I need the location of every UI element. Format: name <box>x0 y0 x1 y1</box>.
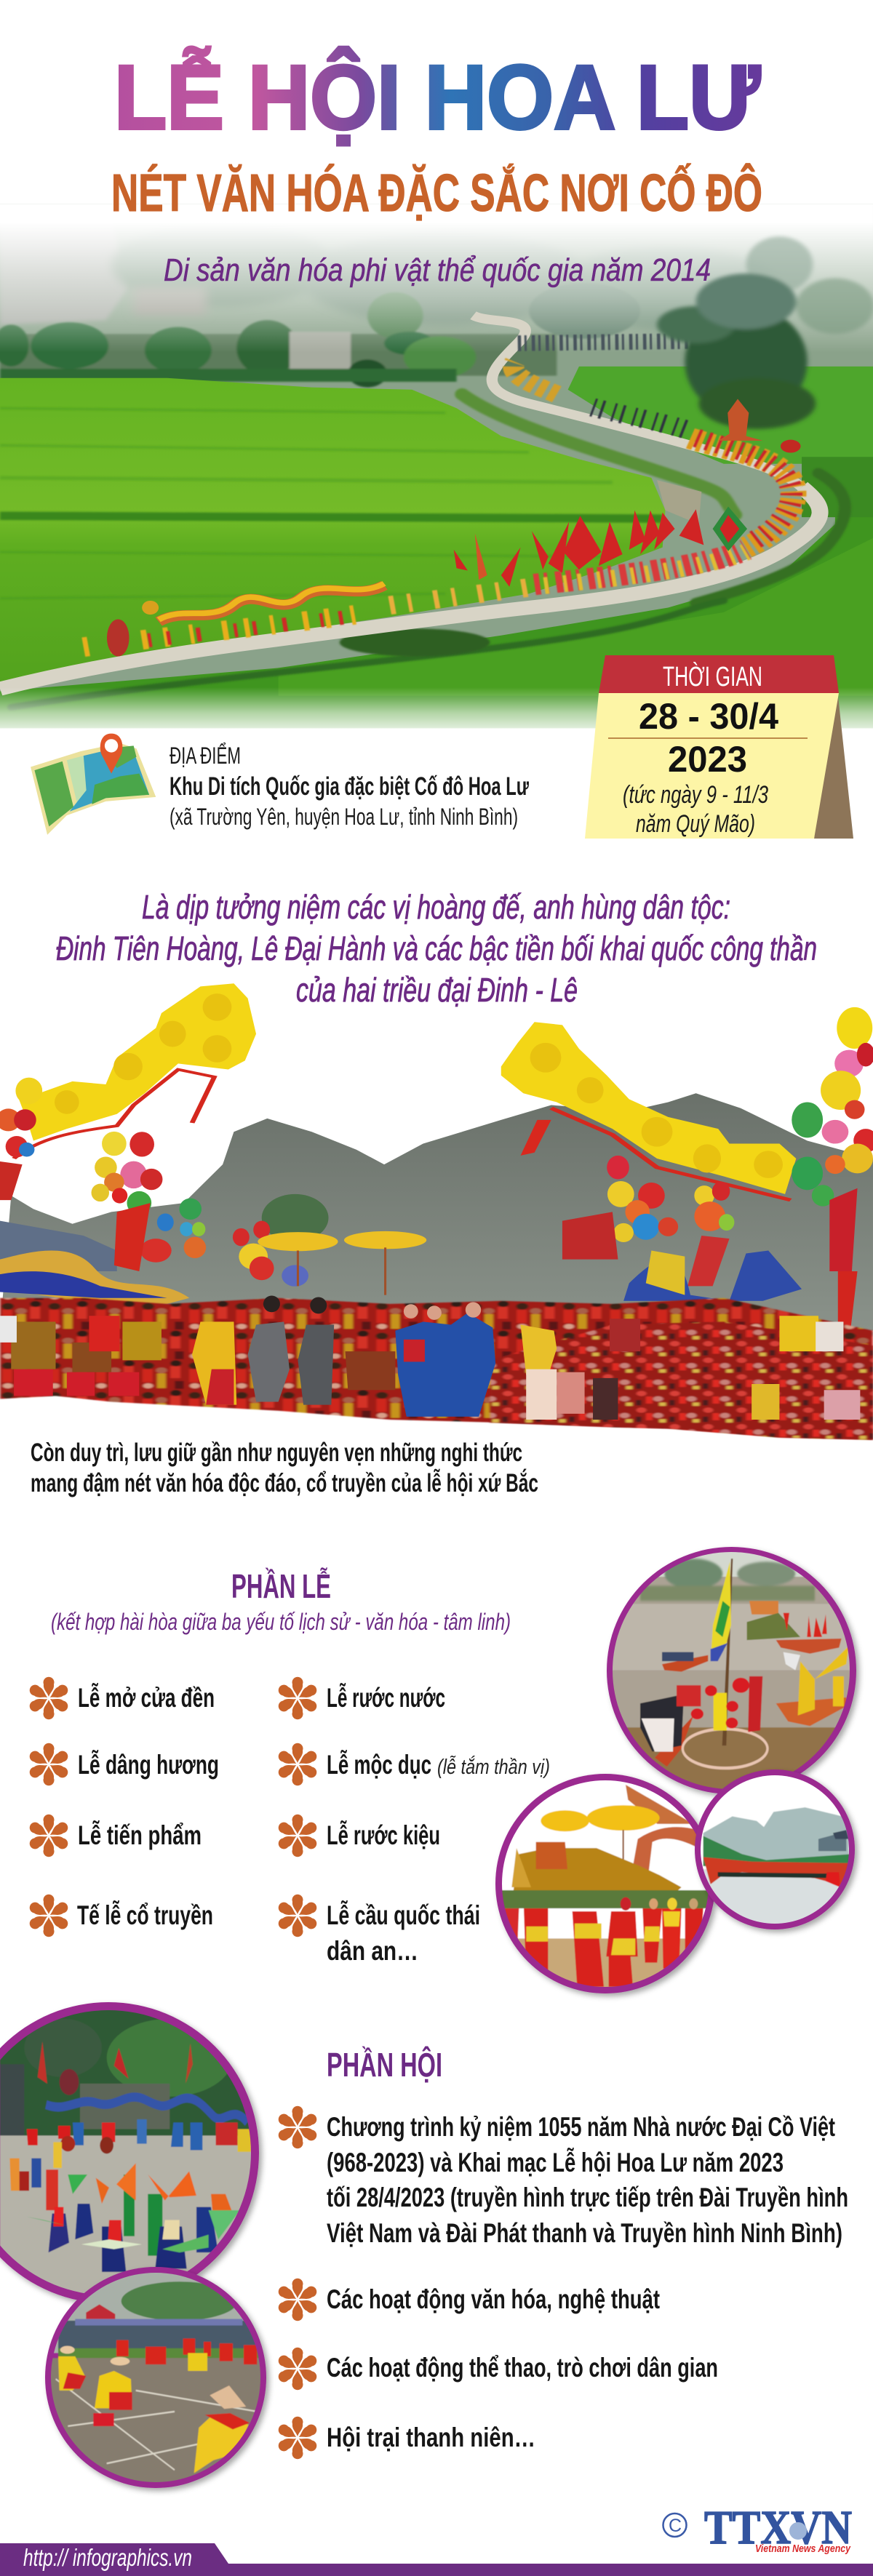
location text: ĐỊA ĐIỂM <box>170 743 241 769</box>
ritual item: Lễ cầu quốc thái <box>327 1900 480 1930</box>
crowd photo: left balloon dragon <box>14 983 256 1159</box>
intro paragraph: mang đậm nét văn hóa độc đáo, cổ truyền của lễ hội xứ Bắc <box>31 1468 538 1497</box>
bamboo grove <box>121 2281 238 2321</box>
icon: flower bullet <box>276 1815 319 1857</box>
hero: palanquin <box>718 399 762 441</box>
hero: lower right field <box>0 517 873 729</box>
copyright symbol: C <box>669 2516 682 2536</box>
drummers <box>9 2119 251 2210</box>
crowd photo: dignitaries in blue and grey robes <box>0 1295 860 1420</box>
panel: crowd photo with balloon dragons <box>0 983 873 1440</box>
tagline: Di sản văn hóa phi vật thể quốc gia năm 2014 <box>164 252 711 288</box>
boats <box>662 1655 708 1672</box>
hero: right upper field <box>568 367 873 464</box>
golden palanquin <box>511 1848 682 1903</box>
panel: hero photo of procession through rice fields <box>0 204 873 738</box>
parasols <box>587 1805 660 1831</box>
calendar year: 2023 <box>668 739 747 780</box>
ritual item: Tế lễ cổ truyền <box>77 1900 213 1930</box>
icon: flower bullet <box>28 1677 70 1719</box>
temple gate <box>633 1827 698 1872</box>
hero: hedges beside road <box>11 394 845 708</box>
hero: mist over the background <box>0 204 873 353</box>
crowd photo: mountains <box>0 1093 873 1331</box>
activity: anniversary programme <box>327 2112 848 2248</box>
ritual item: Lễ rước kiệu <box>327 1820 440 1850</box>
activity: youth camp: Hội trại thanh niên… <box>327 2423 535 2452</box>
icon: flower bullet <box>28 1743 70 1785</box>
dancers with fans <box>27 2163 240 2272</box>
icon: flower bullet <box>276 2279 319 2321</box>
logo: TTXVN Vietnam News Agency: TTXVN <box>704 2501 852 2554</box>
calendar: time of festival <box>585 655 853 839</box>
copyright symbol <box>663 2513 687 2537</box>
crowd photo: parasols <box>258 1231 426 1295</box>
hero: pond <box>657 480 701 524</box>
crowd photo: banners <box>562 1212 618 1260</box>
footer bar with URL: http:// infographics.vn <box>23 2544 192 2571</box>
list: rituals column 2 <box>276 1677 550 1966</box>
list: festival activities <box>276 2106 848 2459</box>
ritual item: Lễ dâng hương <box>78 1750 219 1780</box>
decorated flag <box>722 1559 733 1745</box>
photo circle: dancers in temple courtyard <box>0 2002 259 2303</box>
heading: Phần Hội: PHẦN HỘI <box>327 2046 442 2084</box>
photo circle: boats on river <box>607 1547 856 1794</box>
hero: dragon dance <box>159 583 384 622</box>
title: LỄ HỘI HOA LƯ <box>114 47 760 148</box>
ritual item: Lễ tiến phẩm <box>78 1820 202 1850</box>
wet court <box>49 2358 267 2487</box>
hero: misty treeline <box>112 254 745 331</box>
hero: bush <box>340 628 490 656</box>
crowd photo: balloon clusters <box>0 1007 873 1287</box>
ground <box>485 1938 718 2005</box>
photo circle: palanquin procession <box>485 1774 718 2005</box>
hero: near trees <box>0 283 640 388</box>
hero: limestone cliff <box>0 260 125 325</box>
players <box>58 2338 257 2473</box>
location text: Khu Di tích Quốc gia đặc biệt Cố đô Hoa Lư <box>170 772 529 801</box>
photo circle: boats at Hoa Lu waters <box>695 1769 855 1929</box>
heading: Phần Lễ: PHẦN LỄ <box>231 1567 331 1605</box>
calendar heading: THỜI GIAN <box>663 661 762 692</box>
icon: flower bullet <box>276 2106 319 2148</box>
footer bar with URL <box>0 2543 873 2576</box>
icon: flower bullet <box>276 2417 319 2459</box>
spectators with umbrellas <box>58 2321 257 2353</box>
misty mountains <box>703 1807 849 1866</box>
passengers <box>640 1695 684 1751</box>
bearers in red and yellow <box>502 1897 703 1987</box>
subheading: Phần Lễ: (kết hợp hài hòa giữa ba yếu tố lịch sử - văn hóa - tâm linh) <box>51 1609 511 1635</box>
offering ring and lanterns <box>682 1729 768 1768</box>
location text: (xã Trường Yên, huyện Hoa Lư, tỉnh Ninh Bình) <box>170 804 518 830</box>
intro paragraph <box>31 1439 538 1497</box>
temple wall <box>0 2064 24 2139</box>
hero: winding road <box>0 316 820 689</box>
photo circle: human chess on wet ground <box>45 2267 267 2488</box>
green field <box>485 1890 718 1908</box>
hero: big tree <box>657 236 873 429</box>
list: rituals column 1 <box>28 1677 219 1937</box>
trees and temple <box>703 1836 851 1866</box>
crowd photo: people <box>0 1298 873 1440</box>
hero: flags in the procession <box>454 506 747 587</box>
hero: lion dancer <box>107 619 129 656</box>
flags <box>38 2041 47 2084</box>
purpose statement: của hai triều đại Đinh - Lê <box>296 971 578 1009</box>
icon: flower bullet <box>276 1895 319 1937</box>
logo: TTXVN Vietnam News Agency: Vietnam News Agency <box>755 2543 851 2555</box>
icon: map with pin <box>31 734 156 835</box>
location text <box>170 743 529 830</box>
icon: flower bullet <box>276 1677 319 1719</box>
ritual item: Lễ mở cửa đền <box>78 1683 215 1713</box>
grass edge <box>58 2348 262 2359</box>
icon: flower bullet <box>28 1895 70 1937</box>
hero: field stripes <box>0 408 663 599</box>
activity: culture and arts: Các hoạt động văn hóa, nghệ thuật <box>327 2284 660 2314</box>
hero: bottom fade to white <box>0 689 873 729</box>
calendar date: 28 - 30/4 <box>639 696 778 737</box>
paved courtyard <box>0 2135 257 2301</box>
crowd photo: dragon banner <box>0 1250 189 1304</box>
tent <box>86 2305 115 2319</box>
hero: left rice field <box>0 378 666 682</box>
calendar lunar date: (tức ngày 9 - 11/3 <box>623 781 768 809</box>
crowd photo: right balloon dragon <box>501 1022 796 1200</box>
ritual item: Lễ rước nước <box>327 1683 445 1713</box>
purpose statement <box>56 888 817 1009</box>
icon: flower bullet <box>276 1743 319 1785</box>
river bank trees <box>640 1559 815 1601</box>
icon: flower bullet <box>28 1815 70 1857</box>
blue dragon <box>46 2097 247 2123</box>
hero: procession people on the road <box>84 341 794 647</box>
activity: sports and folk games: Các hoạt động thể thao, trò chơi dân gian <box>327 2353 718 2383</box>
ritual item: Lễ mộc dục <box>327 1750 431 1780</box>
ritual item: dân an… <box>327 1936 418 1966</box>
ritual note: (lễ tắm thần vị) <box>437 1755 550 1779</box>
intro paragraph: Còn duy trì, lưu giữ gần như nguyên vẹn những nghi thức <box>31 1439 522 1467</box>
water <box>698 1869 853 1929</box>
row of boats <box>703 1857 849 1887</box>
icon: flower bullet <box>276 2348 319 2390</box>
calendar lunar date: năm Quý Mão) <box>636 810 755 838</box>
